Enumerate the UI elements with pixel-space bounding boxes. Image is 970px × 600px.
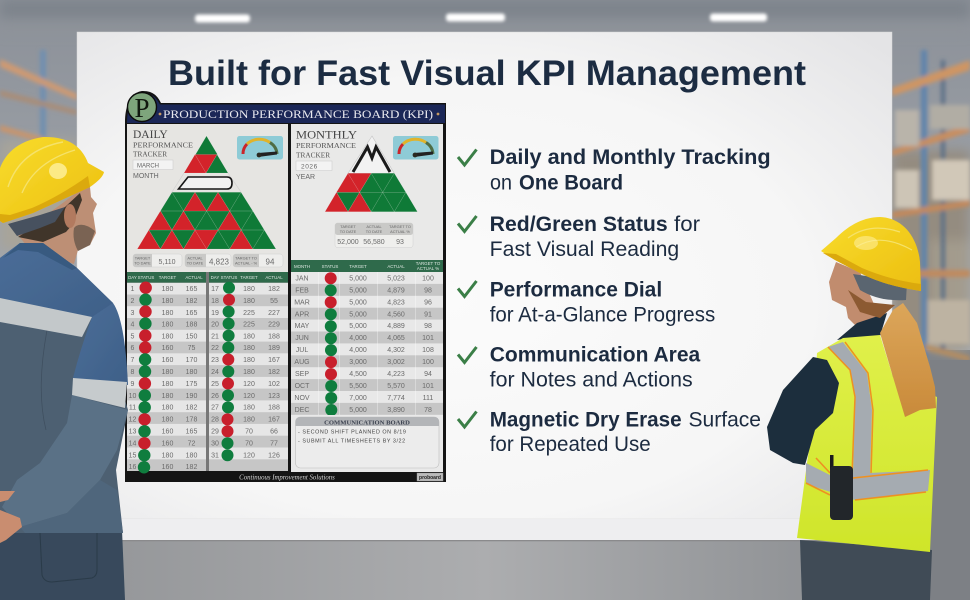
monthly heading: PERFORMANCE (296, 141, 357, 150)
table: daily log: DAY (211, 275, 219, 280)
daily rows: days 1 to 16: 16 (129, 464, 136, 471)
daily rows: days 1 to 16: 188 (186, 322, 197, 328)
monthly rows: MAR (294, 299, 310, 306)
face and neck (829, 262, 880, 325)
monthly totals: TO DATE (340, 229, 357, 234)
daily rows: days 17 to 31: 70 (245, 428, 253, 436)
feature list (458, 146, 771, 456)
panel: communication board: - SUBMIT ALL TIMESHEETS BY 3/22 (298, 438, 406, 444)
daily rows: days 1 to 16: 72 (188, 440, 195, 448)
feature: magnetic dry erase surface: Surface (688, 409, 761, 432)
feature: daily and monthly tracking: on (490, 171, 512, 194)
daily rows: days 17 to 31: 77 (270, 440, 278, 448)
board footer: Continuous Improvement Solutions (239, 474, 335, 482)
monthly rows: 101 (422, 335, 434, 342)
daily heading: PERFORMANCE (133, 140, 194, 150)
daily rows: days 17 to 31 (211, 286, 280, 460)
daily pyramid (137, 136, 276, 249)
performance dial: daily (237, 136, 283, 160)
daily rows: days 17 to 31: 180 (243, 298, 255, 305)
daily rows: days 1 to 16: 180 (162, 416, 173, 424)
feature: magnetic dry erase surface (458, 409, 761, 456)
daily rows: days 1 to 16: 180 (162, 393, 173, 400)
table: monthly log: TARGET TO (416, 261, 441, 266)
monthly rows: 5,000 (349, 276, 367, 282)
daily rows: days 17 to 31: 19 (211, 310, 219, 317)
daily rows: days 17 to 31: 23 (211, 357, 219, 364)
daily totals (133, 254, 283, 267)
daily rows: days 17 to 31: 29 (211, 428, 219, 436)
daily heading: TRACKER (133, 150, 167, 158)
production performance board (125, 91, 446, 482)
monthly rows: 5,000 (349, 407, 367, 414)
feature: red and green status: Red/Green Status (490, 213, 668, 236)
daily rows: days 1 to 16: 170 (186, 357, 197, 364)
daily rows: days 1 to 16: 160 (162, 440, 173, 448)
daily rows: days 17 to 31: 24 (211, 369, 219, 376)
monthly rows: 5,000 (349, 288, 367, 294)
worker: man in hard hat (0, 137, 128, 600)
monthly rows: 4,889 (387, 323, 405, 330)
daily rows: days 1 to 16: 180 (162, 404, 173, 412)
monthly rows: JUL (296, 347, 308, 354)
daily rows: days 1 to 16: 2 (131, 298, 135, 305)
monthly heading (296, 130, 358, 181)
daily rows: days 17 to 31: 18 (211, 298, 219, 305)
monthly rows: 3,890 (387, 407, 405, 414)
panel: communication board (291, 415, 443, 472)
daily totals: ACTUAL - % (235, 260, 258, 266)
ceiling lights (195, 14, 767, 22)
left shelving (40, 50, 46, 140)
monthly rows: 4,560 (387, 311, 405, 318)
daily totals: TARGET (135, 256, 151, 260)
monthly heading: YEAR (296, 174, 315, 181)
panel: monthly tracker (291, 124, 443, 260)
monthly totals: TO DATE (366, 229, 383, 234)
monthly rows: DEC (295, 407, 309, 414)
daily rows: days 17 to 31: 180 (243, 404, 255, 412)
panel: communication board: COMMUNICATION BOARD (324, 420, 410, 426)
daily rows: days 17 to 31: 180 (243, 416, 255, 424)
daily rows: days 1 to 16: 180 (186, 452, 197, 460)
daily rows: days 17 to 31: 180 (243, 357, 255, 364)
daily rows: days 1 to 16: 160 (162, 345, 173, 352)
daily rows: days 1 to 16: 14 (129, 440, 136, 448)
daily rows: days 17 to 31: 189 (268, 345, 280, 352)
daily rows: days 17 to 31: 120 (243, 452, 255, 460)
daily rows: days 17 to 31: 26 (211, 393, 219, 400)
daily rows: days 17 to 31: 188 (268, 404, 280, 412)
right shelving (921, 50, 927, 360)
daily totals: TARGET TO (235, 256, 257, 260)
monthly rows: 4,223 (387, 371, 405, 378)
daily totals: ACTUAL (187, 256, 204, 260)
monthly rows: 5,500 (349, 383, 367, 390)
feature: communication area: for Notes and Actions (490, 369, 693, 392)
daily rows: days 17 to 31: 180 (243, 369, 255, 376)
daily rows: days 1 to 16: 6 (131, 345, 135, 352)
daily rows: days 1 to 16: 182 (186, 464, 197, 471)
daily rows: days 17 to 31: 102 (268, 381, 280, 388)
daily rows: days 1 to 16: 1 (131, 286, 135, 293)
daily rows: days 1 to 16: 9 (131, 381, 135, 388)
daily rows: days 17 to 31: 17 (211, 286, 219, 293)
daily totals: TO DATE (187, 260, 204, 266)
daily rows: days 1 to 16: 165 (186, 286, 197, 293)
daily rows: days 17 to 31: 55 (270, 298, 278, 305)
monthly pyramid (325, 136, 417, 212)
monthly rows: 111 (423, 395, 433, 402)
two-way radio (830, 455, 853, 520)
monthly rows: AUG (294, 359, 310, 366)
monthly rows: 4,879 (387, 288, 405, 294)
panel: daily tracker (127, 124, 288, 272)
daily rows: days 1 to 16: 180 (162, 452, 173, 460)
monthly rows: SEP (295, 371, 309, 378)
daily rows: days 17 to 31: 188 (268, 333, 280, 340)
daily rows: days 1 to 16: 180 (162, 310, 173, 317)
monthly rows: 5,570 (387, 383, 405, 390)
monthly rows: 3,000 (349, 359, 367, 366)
monthly status magnets (325, 272, 337, 416)
pants (0, 530, 125, 600)
daily rows: days 17 to 31: 182 (268, 369, 280, 376)
daily rows: days 1 to 16: 12 (129, 416, 136, 424)
daily heading (133, 129, 194, 180)
daily rows: days 1 to 16: 180 (162, 333, 173, 340)
daily rows: days 1 to 16: 3 (131, 310, 135, 317)
board header band: P (134, 93, 150, 123)
monthly heading: 2026 (301, 163, 318, 170)
monthly rows: 5,000 (349, 323, 367, 330)
white display wall (77, 32, 892, 541)
monthly rows: 4,823 (387, 299, 405, 306)
monthly rows: 4,065 (387, 335, 405, 342)
monthly heading: MONTHLY (296, 130, 358, 142)
monthly rows: NOV (294, 395, 310, 402)
reflective stripes (806, 342, 930, 500)
monthly heading: TRACKER (296, 150, 330, 159)
monthly rows: 100 (422, 359, 434, 366)
safety vest (797, 335, 937, 552)
monthly rows: 5,023 (387, 276, 405, 282)
daily rows: days 17 to 31: 225 (243, 310, 255, 317)
feature: red and green status (458, 213, 700, 261)
board frame (125, 91, 446, 482)
jacket sleeve (73, 303, 128, 385)
daily rows: days 1 to 16: 75 (188, 345, 195, 352)
feature: daily and monthly tracking: One Board (519, 171, 623, 194)
monthly totals (335, 223, 413, 248)
daily rows: days 17 to 31: 30 (211, 440, 219, 448)
board footer: proboard (419, 475, 441, 481)
daily rows: days 17 to 31: 167 (268, 357, 280, 364)
monthly rows: JAN (295, 276, 309, 282)
daily rows: days 17 to 31: 126 (268, 452, 280, 460)
neck and head (8, 187, 97, 264)
ponytail (880, 303, 936, 417)
daily rows: days 1 to 16: 15 (129, 452, 136, 460)
daily rows: days 17 to 31: 180 (243, 333, 255, 340)
daily rows: days 1 to 16: 11 (129, 404, 136, 412)
table: daily log: TARGET (159, 275, 177, 280)
feature: performance dial: for At-a-Glance Progress (490, 304, 715, 327)
board footer (239, 473, 443, 482)
monthly rows: 5,000 (349, 299, 367, 306)
title: Built for Fast Visual KPI Management (168, 53, 806, 93)
worker: woman in safety vest (767, 217, 937, 600)
daily rows: days 1 to 16: 4 (131, 322, 135, 328)
daily rows: days 17 to 31: 167 (268, 416, 280, 424)
daily rows: days 1 to 16: 5 (131, 333, 135, 340)
hard hat strap (853, 274, 907, 300)
monthly rows: 108 (422, 347, 434, 354)
hard hat (821, 217, 921, 291)
daily status magnets (138, 282, 235, 473)
table: daily log: ACTUAL (185, 275, 203, 280)
table: daily log: ACTUAL (265, 275, 283, 280)
feature: performance dial (458, 279, 715, 327)
monthly rows: 4,302 (387, 347, 405, 354)
daily rows: days 17 to 31: 25 (211, 381, 219, 388)
table: daily log (127, 272, 288, 473)
monthly rows: 96 (424, 299, 432, 306)
daily rows: days 1 to 16: 150 (186, 333, 197, 340)
table: monthly log: ACTUAL (387, 264, 405, 269)
daily rows: days 17 to 31: 70 (245, 440, 253, 448)
daily rows: days 1 to 16: 178 (186, 416, 197, 424)
daily totals: 94 (266, 258, 275, 266)
daily totals: TO DATE (134, 260, 151, 266)
daily rows: days 17 to 31: 180 (243, 286, 255, 293)
monthly rows: FEB (295, 288, 309, 294)
monthly rows (294, 276, 434, 414)
daily rows: days 1 to 16: 182 (186, 298, 197, 305)
daily rows: days 1 to 16: 180 (186, 369, 197, 376)
daily rows: days 1 to 16: 10 (129, 393, 136, 400)
daily heading: MARCH (137, 163, 159, 169)
daily rows: days 17 to 31: 27 (211, 404, 219, 412)
feature: daily and monthly tracking: Daily and Monthly Tracking (490, 146, 771, 169)
monthly totals: 56,580 (363, 239, 385, 246)
feature: magnetic dry erase surface: for Repeated Use (490, 433, 651, 456)
table: monthly log: MONTH (294, 264, 310, 269)
daily rows: days 17 to 31: 123 (268, 393, 280, 400)
daily rows: days 17 to 31: 22 (211, 345, 219, 352)
daily rows: days 17 to 31: 227 (268, 310, 280, 317)
monthly rows: 98 (424, 288, 432, 294)
daily rows: days 1 to 16: 160 (162, 428, 173, 436)
monthly rows: APR (295, 311, 309, 318)
monthly totals: TARGET (340, 224, 356, 229)
daily rows: days 1 to 16: 180 (162, 369, 173, 376)
board header band: PRODUCTION PERFORMANCE BOARD (KPI) (163, 107, 433, 121)
daily rows: days 17 to 31: 28 (211, 416, 219, 424)
monthly rows: OCT (295, 383, 310, 390)
pants (800, 540, 932, 600)
performance dial: monthly (393, 136, 438, 160)
daily rows: days 17 to 31: 182 (268, 286, 280, 293)
daily rows: days 1 to 16: 13 (129, 428, 136, 436)
dark collar (837, 313, 887, 340)
feature: red and green status: for (674, 213, 700, 236)
table: daily log: STATUS (221, 275, 237, 280)
monthly rows: 100 (422, 276, 434, 282)
panel: communication board: - SECOND SHIFT PLANNED ON 8/19 (298, 430, 406, 436)
daily rows: days 1 to 16: 160 (162, 357, 173, 364)
daily rows: days 17 to 31: 180 (243, 345, 255, 352)
daily rows: days 1 to 16: 180 (162, 322, 173, 328)
dark shirt sleeve (767, 357, 839, 465)
monthly rows: JUN (295, 335, 309, 342)
daily rows: days 1 to 16: 182 (186, 404, 197, 412)
monthly rows: 7,000 (349, 395, 367, 402)
reflective stripes (0, 298, 92, 337)
daily rows: days 17 to 31: 20 (211, 322, 219, 328)
feature: communication area: Communication Area (490, 344, 701, 367)
monthly rows: 4,000 (349, 347, 367, 354)
monthly rows: 3,002 (387, 359, 405, 366)
monthly rows: 4,000 (349, 335, 367, 342)
jacket torso (0, 243, 128, 533)
daily heading: DAILY (133, 129, 168, 141)
daily rows: days 1 to 16: 190 (186, 393, 197, 400)
hands (0, 491, 22, 543)
daily totals: 5,110 (158, 259, 176, 266)
monthly rows: 78 (424, 407, 432, 414)
monthly totals: 52,000 (337, 239, 359, 246)
daily rows: days 1 to 16: 7 (131, 357, 135, 364)
monthly totals: ACTUAL % (390, 229, 410, 234)
table: daily log: STATUS (138, 275, 154, 280)
feature: performance dial: Performance Dial (490, 279, 662, 302)
daily rows: days 1 to 16 (129, 286, 197, 471)
monthly rows: 5,000 (349, 311, 367, 318)
table: monthly log (291, 260, 443, 416)
daily rows: days 17 to 31: 120 (243, 381, 255, 388)
daily rows: days 17 to 31: 229 (268, 322, 280, 328)
daily rows: days 1 to 16: 165 (186, 428, 197, 436)
daily rows: days 17 to 31: 120 (243, 393, 255, 400)
table: daily log: DAY (128, 275, 137, 280)
daily rows: days 1 to 16: 165 (186, 310, 197, 317)
daily rows: days 1 to 16: 180 (162, 381, 173, 388)
monthly rows: 101 (422, 383, 434, 390)
monthly totals: ACTUAL (366, 224, 383, 229)
daily rows: days 17 to 31: 21 (211, 333, 219, 340)
feature: communication area (458, 344, 701, 392)
daily rows: days 1 to 16: 180 (162, 286, 173, 293)
monthly rows: 98 (424, 323, 432, 330)
daily rows: days 1 to 16: 8 (131, 369, 135, 376)
monthly rows: 4,500 (349, 371, 367, 378)
monthly rows: 91 (424, 311, 432, 318)
feature: daily and monthly tracking (458, 146, 771, 194)
daily rows: days 1 to 16: 160 (162, 464, 173, 471)
board header band (127, 92, 445, 123)
daily pyramid sign (178, 177, 232, 189)
table: monthly log: TARGET (349, 264, 367, 269)
table: monthly log: STATUS (322, 264, 338, 269)
hard hat (0, 137, 104, 223)
table: daily log: TARGET (240, 275, 258, 280)
hair behind neck (848, 290, 895, 318)
daily rows: days 1 to 16: 180 (162, 298, 173, 305)
monthly totals: TARGET TO (389, 224, 411, 229)
monthly rows: MAY (295, 323, 310, 330)
monthly totals: 93 (396, 239, 404, 246)
daily totals: 4,823 (209, 257, 230, 266)
daily rows: days 17 to 31: 66 (270, 428, 278, 436)
feature: red and green status: Fast Visual Reading (490, 238, 679, 261)
feature: magnetic dry erase surface: Magnetic Dry Erase (490, 409, 682, 432)
daily rows: days 1 to 16: 175 (186, 381, 197, 388)
daily heading: MONTH (133, 173, 159, 180)
daily rows: days 17 to 31: 31 (211, 452, 219, 460)
monthly rows: 94 (424, 371, 432, 378)
monthly rows: 7,774 (387, 395, 405, 402)
table: monthly log: ACTUAL % (417, 266, 439, 271)
daily rows: days 17 to 31: 225 (243, 322, 255, 328)
